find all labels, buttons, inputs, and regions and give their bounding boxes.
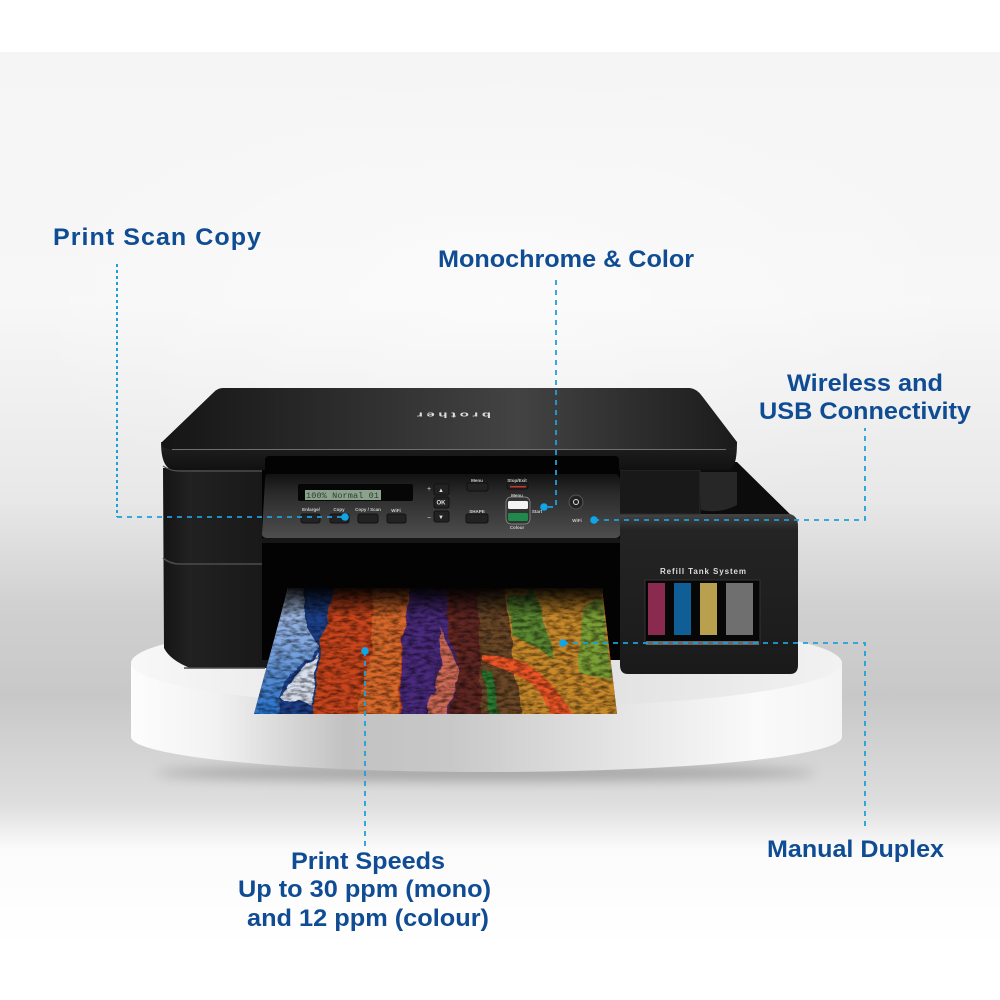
panel labels	[302, 478, 582, 530]
panel labels: Stop/Exit	[507, 478, 527, 483]
callout: print speeds: Print Speeds	[291, 848, 445, 875]
panel labels: Start	[532, 509, 543, 514]
printer left body	[163, 466, 270, 668]
LCD display: 100% Normal 01	[306, 491, 379, 501]
printer	[161, 388, 798, 674]
panel labels: +	[427, 486, 431, 493]
callout: monochrome and color	[438, 246, 694, 511]
panel labels: WiFi	[572, 518, 582, 523]
control panel	[262, 474, 620, 543]
panel labels: WiFi	[391, 508, 401, 513]
panel labels: ▲	[438, 488, 444, 494]
callout: manual duplex: Manual Duplex	[767, 836, 945, 863]
ink tank window	[645, 580, 760, 645]
refill tank unit	[618, 462, 798, 674]
panel labels: ▼	[438, 515, 444, 521]
panel labels: Menu	[471, 478, 483, 483]
callout: print scan copy	[53, 224, 349, 521]
panel labels: Copy / Scan	[355, 507, 381, 512]
callout: wireless and USB: Wireless and	[787, 370, 943, 397]
tank label: Refill Tank System	[660, 567, 746, 576]
callout: print speeds: and 12 ppm (colour)	[247, 905, 489, 932]
panel labels: −	[427, 515, 431, 522]
panel labels: Colour	[510, 525, 524, 530]
printer lid	[161, 388, 737, 476]
panel labels: Menu	[511, 493, 523, 498]
panel labels: Enlarge/	[302, 507, 321, 512]
callout: wireless and USB	[590, 370, 972, 524]
printed photo	[254, 588, 617, 714]
round white platform	[131, 618, 842, 781]
centre opening	[262, 460, 620, 660]
callout: monochrome and color: Monochrome & Color	[438, 246, 694, 273]
callout: manual duplex	[559, 639, 945, 863]
callout: print speeds: Up to 30 ppm (mono)	[238, 876, 491, 903]
callout: print speeds	[238, 647, 491, 932]
panel labels: OK	[436, 500, 446, 506]
panel labels: SHAPE	[469, 509, 485, 514]
panel buttons	[301, 483, 583, 524]
panel labels: Copy	[333, 507, 345, 512]
LCD display	[298, 484, 413, 501]
brother logo: brother	[417, 411, 491, 419]
callout: print scan copy: Print Scan Copy	[53, 224, 262, 251]
callout: wireless and USB: USB Connectivity	[759, 398, 972, 425]
